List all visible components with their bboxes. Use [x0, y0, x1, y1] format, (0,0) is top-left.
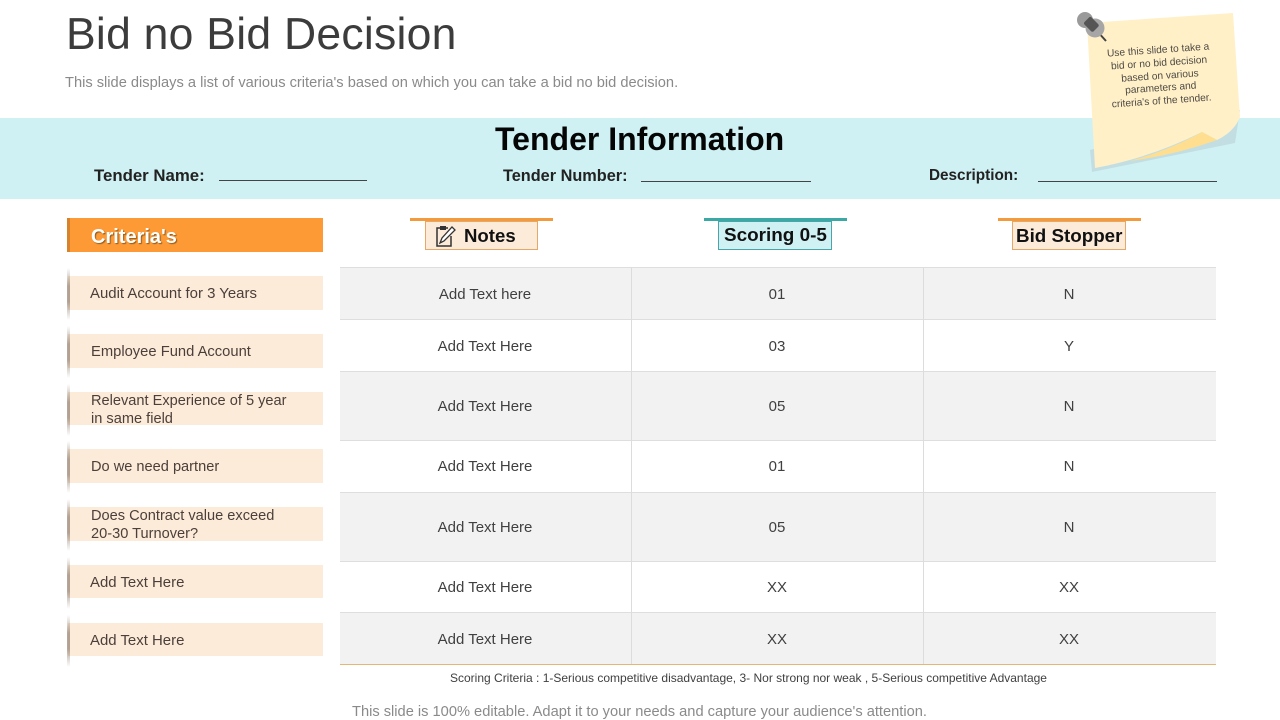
row 2: 03: [769, 338, 785, 355]
row 4: Add Text Here: [438, 458, 532, 475]
text: Do we need partner: [91, 459, 219, 475]
sticky note text: criteria's of the tender.: [1111, 93, 1212, 111]
row 3: [438, 398, 1074, 415]
criterion 7: [68, 623, 323, 656]
icon: notepad and pen: [436, 226, 456, 247]
scoring table: [340, 267, 1216, 665]
field: description: Description:: [929, 167, 1018, 184]
row 1: 01: [769, 286, 785, 303]
scoring criteria note: Scoring Criteria : 1-Serious competitive disadvantage, 3- Nor strong nor weak , 5-Serious competitive Advantage: [450, 671, 1047, 685]
criteria header: Criteria's: [91, 226, 177, 248]
icon: push pin: [1077, 12, 1106, 41]
row 4: 01: [769, 458, 785, 475]
sticky note: [1077, 12, 1240, 172]
row 2: Add Text Here: [438, 338, 532, 355]
title: Bid no Bid Decision: [66, 10, 457, 59]
text: Employee Fund Account: [91, 344, 251, 360]
text: in same field: [91, 411, 173, 427]
text: Relevant Experience of 5 year: [91, 393, 287, 409]
row 5: N: [1064, 519, 1074, 536]
footer note: This slide is 100% editable. Adapt it to your needs and capture your audience's attention.: [352, 704, 927, 720]
column header: notes: [410, 218, 553, 250]
row 7: XX: [1059, 631, 1079, 648]
row 4: [438, 458, 1074, 475]
column header: scoring: Scoring 0-5: [724, 225, 827, 246]
row 6: [438, 579, 1079, 596]
row 7: XX: [767, 631, 787, 648]
panel: tender information band: [0, 118, 1280, 199]
sticky note text: Use this slide to take a: [1107, 42, 1210, 60]
heading: tender information: Tender Information: [495, 121, 784, 157]
field: tender name: Tender Name:: [94, 166, 205, 185]
text: Does Contract value exceed: [91, 508, 274, 524]
row 6: XX: [1059, 579, 1079, 596]
criteria header: [67, 218, 323, 252]
column header: bid stopper: Bid Stopper: [1016, 225, 1122, 246]
row 3: Add Text Here: [438, 398, 532, 415]
text: Audit Account for 3 Years: [90, 285, 257, 302]
row 5: 05: [769, 519, 785, 536]
sticky note text: parameters and: [1125, 81, 1197, 97]
sticky note text: based on various: [1121, 68, 1199, 84]
criteria bar separators: [67, 270, 70, 666]
text: 20-30 Turnover?: [91, 526, 198, 542]
row 1: N: [1064, 286, 1074, 303]
criterion 6: [68, 565, 323, 598]
field: tender number: Tender Number:: [503, 167, 628, 185]
column header: scoring: [704, 218, 847, 250]
row 7: [438, 631, 1079, 648]
column header: notes: Notes: [464, 225, 516, 246]
criterion 2: [68, 334, 323, 368]
subtitle: This slide displays a list of various criteria's based on which you can take a bid no bid decision.: [65, 75, 678, 91]
criterion 5: [68, 507, 323, 541]
table backgrounds: [340, 267, 1216, 665]
criterion 3: [68, 392, 323, 425]
row 1: [439, 286, 1074, 303]
row 2: Y: [1064, 338, 1074, 355]
row 7: Add Text Here: [438, 631, 532, 648]
row 6: Add Text Here: [438, 579, 532, 596]
row 5: Add Text Here: [438, 519, 532, 536]
sticky note text: bid or no bid decision: [1111, 54, 1207, 72]
text: Add Text Here: [90, 574, 184, 591]
row 4: N: [1064, 458, 1074, 475]
row 3: 05: [769, 398, 785, 415]
sticky note text: [1107, 42, 1212, 111]
criterion 1: [68, 276, 323, 310]
row 5: [438, 519, 1074, 536]
criterion 4: [68, 449, 323, 483]
column header: bid stopper: [998, 218, 1141, 250]
row 1: Add Text here: [439, 286, 531, 303]
text: Add Text Here: [90, 632, 184, 649]
row 2: [438, 338, 1074, 355]
row 6: XX: [767, 579, 787, 596]
row 3: N: [1064, 398, 1074, 415]
